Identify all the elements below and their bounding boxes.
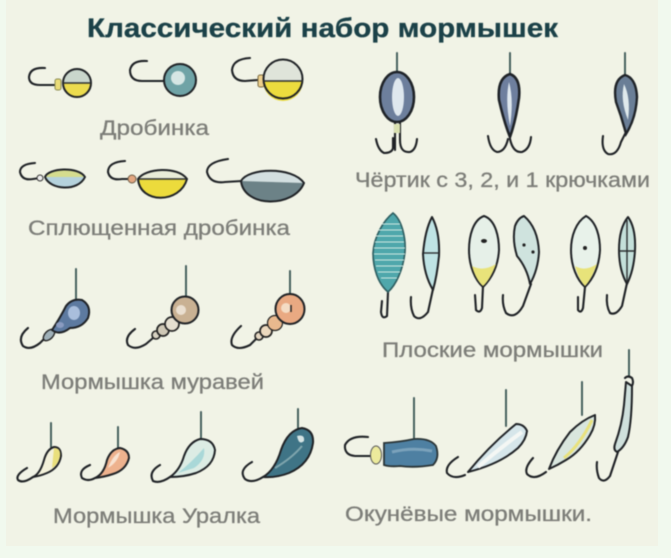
panel: Мормышка муравей — [21, 266, 304, 348]
icon: pale blue uralka — [152, 412, 215, 482]
panel: Окунёвые мормышки — [345, 350, 633, 481]
icon: devil with three hooks — [376, 53, 417, 153]
icon: small ball jig — [29, 68, 91, 97]
label: Дробинка: Дробинка — [100, 116, 209, 140]
panel: Чёртик — [376, 53, 637, 154]
label: Окунёвые мормышки: Окунёвые мормышки. — [345, 502, 592, 526]
icon: small flat ball — [20, 163, 85, 188]
icon: flat teal jig side — [411, 217, 439, 318]
label: Мормышка Уралка: Мормышка Уралка — [53, 504, 260, 528]
label: Сплющенная дробинка: Сплющенная дробинка — [28, 216, 290, 240]
label: Плоские мормышки: Плоские мормышки — [382, 338, 603, 362]
icon: yellow uralka — [17, 423, 61, 481]
panel: Мормышка Уралка — [17, 409, 313, 482]
icon: devil with two hooks — [488, 53, 531, 152]
title: Классический набор мормышек — [87, 13, 559, 43]
icon: peach uralka — [81, 427, 129, 480]
icon: tan ant jig — [127, 266, 198, 348]
icon: dark teal uralka — [243, 409, 313, 481]
icon: pale wedge jig — [447, 390, 527, 477]
icon: pale flat jig front — [469, 216, 499, 312]
label: Мормышка муравей: Мормышка муравей — [41, 370, 264, 394]
icon: teal ball jig — [130, 61, 196, 96]
icon: devil with one hook — [603, 53, 637, 154]
icon: orange ant jig — [231, 271, 304, 348]
icon: slim side jig — [597, 350, 633, 481]
icon: yellow flat ball — [108, 161, 187, 198]
icon: pale flat jig side — [503, 216, 539, 315]
icon: flat teal jig front — [373, 213, 405, 317]
icon: pale flat jig with dot — [571, 216, 600, 312]
icon: narrow flat jig — [607, 217, 635, 314]
panel: Сплющенная дробинка — [20, 159, 304, 202]
label: Чёртик: Чёртик с 3, 2, и 1 крючками — [355, 168, 650, 192]
icon: large grey flat ball — [207, 159, 304, 202]
icon: yellow-streak wedge jig — [526, 382, 595, 477]
icon: blue barrel jig — [345, 398, 437, 467]
panel: Дробинка — [29, 58, 303, 101]
panel: Плоские мормышки — [373, 213, 635, 318]
icon: large ball jig — [232, 58, 303, 101]
icon: blue ant jig — [21, 269, 89, 348]
